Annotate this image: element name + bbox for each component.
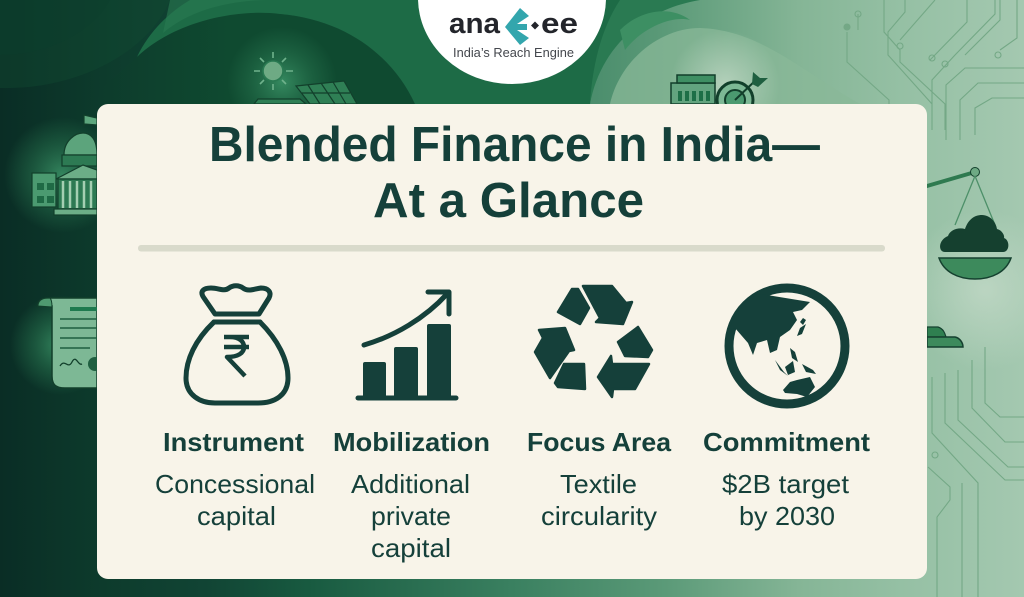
icon: building with target [671,72,768,118]
logo wordmark: ana [449,8,501,40]
column: commitment [703,288,870,531]
icon: globe [722,288,845,404]
description: $2B target [722,469,850,499]
label: Mobilization [333,427,490,457]
icon: money bag with rupee [186,286,288,403]
title: At a Glance [373,174,644,228]
column: mobilization [333,292,490,563]
icon: recycle [535,286,652,397]
label: Instrument [163,427,304,457]
column: instrument [155,286,315,531]
icon: growth bar chart [358,292,456,398]
description: Concessional [155,469,315,499]
icon: green mound [927,327,963,347]
title: Blended Finance in India— [209,118,820,172]
description: capital [197,501,276,531]
label: Commitment [703,427,870,457]
title [209,118,820,228]
description: capital [371,533,451,563]
description: Additional [351,469,470,499]
description: Textile [560,469,637,499]
circuit lines [844,0,1024,597]
logo badge [418,0,606,84]
description: by 2030 [739,501,835,531]
icon: solar panels [254,81,357,104]
logo wordmark: ee [541,8,578,40]
description [155,469,315,531]
icon: scroll document [38,298,102,388]
label: Focus Area [527,427,672,457]
icon: government building [32,115,97,215]
panel: main card [97,104,927,579]
description [722,469,850,531]
description [351,469,470,563]
description: private [371,501,451,531]
logo wordmark [449,8,578,40]
icon: balance scale [927,168,1011,279]
description: circularity [541,501,657,531]
icon: sun [254,52,293,90]
tagline: India’s Reach Engine [453,46,574,60]
column: focus area [527,286,672,531]
description [541,469,657,531]
logo mark [505,8,529,45]
